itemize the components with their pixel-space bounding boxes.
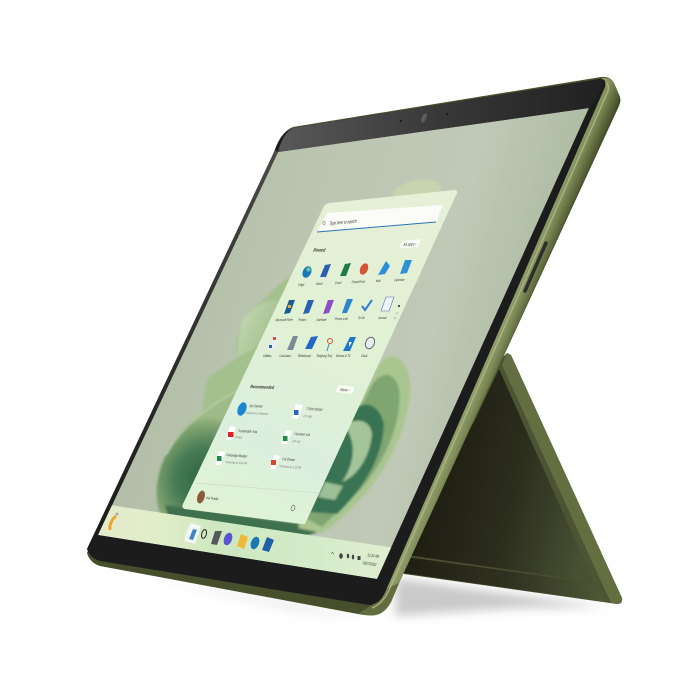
app: Whiteboard bbox=[297, 336, 318, 358]
black bezel bbox=[87, 79, 605, 605]
edge icon bbox=[249, 536, 261, 550]
store icon bbox=[262, 537, 274, 552]
kickstand recess line bbox=[411, 556, 592, 582]
app: Clock: Clock bbox=[360, 354, 369, 358]
search box: Type here to search bbox=[329, 218, 358, 226]
screen bbox=[98, 108, 589, 579]
widgets icon bbox=[211, 531, 222, 545]
app: Journal bbox=[377, 297, 394, 320]
app: Calculator: Calculator bbox=[279, 354, 293, 358]
app: OneNote bbox=[315, 300, 334, 322]
start menu bbox=[182, 190, 457, 524]
app: Utilities bbox=[263, 336, 280, 358]
file: T-Shirt Design: 17m ago bbox=[303, 414, 313, 419]
bloom: band under menu bbox=[164, 504, 318, 536]
app: Photos bbox=[298, 300, 314, 322]
file: Campaign Budget: Yesterday at 4:24 PM bbox=[225, 460, 248, 466]
app: Mail bbox=[375, 261, 390, 283]
app: Edge: Edge bbox=[298, 283, 305, 287]
all apps button bbox=[399, 239, 421, 248]
app: Phone Link bbox=[334, 299, 353, 321]
clock text: 10/27/2022 bbox=[362, 561, 377, 567]
file: Campaign Budget: Campaign Budget bbox=[226, 453, 248, 459]
wallpaper background bbox=[98, 108, 589, 579]
app: Calculator bbox=[279, 336, 298, 358]
app: Movies & TV: Movies & TV bbox=[335, 354, 352, 358]
file: Sustainable Sea bbox=[226, 426, 258, 440]
clock text: 12:22 AM bbox=[367, 553, 380, 559]
recommended heading: Recommended bbox=[250, 384, 275, 390]
app: Snipping Tool bbox=[316, 338, 333, 358]
chat icon bbox=[222, 532, 234, 546]
frame side strip bbox=[362, 78, 620, 615]
app: Snipping Tool: Snipping Tool bbox=[316, 354, 333, 358]
file: Sustainable Sea: Sustainable Sea bbox=[238, 429, 258, 434]
tablet bbox=[87, 77, 620, 615]
app: Mail: Mail bbox=[375, 279, 382, 283]
app: OneNote: OneNote bbox=[315, 318, 327, 322]
file: Get Started: Welcome to Windows bbox=[246, 411, 269, 416]
weather icon bbox=[110, 512, 118, 530]
app: Excel: Excel bbox=[335, 281, 342, 285]
sensor left bbox=[400, 120, 402, 122]
app: Calendar bbox=[393, 260, 412, 282]
left bezel edge bbox=[87, 150, 278, 549]
more button: More › bbox=[340, 388, 351, 393]
app: Movies & TV bbox=[335, 337, 356, 358]
file: Volunteer List: 12h ago bbox=[292, 439, 302, 444]
kickstand outer rim bbox=[502, 353, 622, 604]
bloom: right middle petal bbox=[305, 375, 400, 527]
app: Clock bbox=[361, 336, 376, 357]
app: Whiteboard: Whiteboard bbox=[297, 354, 312, 358]
kickstand bottom band bbox=[400, 556, 606, 602]
app: Photos: Photos bbox=[298, 318, 307, 322]
kickstand bbox=[390, 353, 622, 604]
bloom: left rolled petals bbox=[202, 277, 290, 411]
bloom bbox=[157, 179, 441, 542]
bloom: top back petal bbox=[392, 179, 441, 285]
side button bbox=[525, 243, 546, 291]
bloom: right outer petal bbox=[298, 356, 410, 533]
file: Car Dream bbox=[270, 455, 302, 470]
bloom: large lower left petal bbox=[156, 392, 260, 519]
bloom: right dark fold bbox=[310, 404, 384, 514]
kickstand recess bbox=[395, 369, 593, 582]
file: Get Started: Get Started bbox=[249, 404, 263, 409]
pager dots bbox=[394, 305, 400, 319]
clock text bbox=[362, 553, 380, 567]
app: Word: Word bbox=[316, 282, 323, 286]
more button bbox=[336, 385, 355, 394]
tablet frame base bbox=[87, 77, 620, 615]
tray icons bbox=[331, 552, 360, 560]
bloom: pale curl bbox=[342, 421, 372, 482]
bloom: pale lower fold bbox=[318, 482, 343, 500]
frame corner shading bbox=[358, 583, 399, 615]
frame highlight bbox=[372, 81, 608, 608]
pinned heading: Pinned bbox=[313, 247, 327, 253]
file: Volunteer List bbox=[282, 430, 311, 444]
menu footer divider bbox=[196, 483, 318, 493]
file: Car Dream: Car Dream bbox=[282, 457, 296, 462]
app: Excel bbox=[335, 263, 351, 285]
app: PowerPoint: PowerPoint bbox=[351, 279, 366, 284]
ground shadow bbox=[140, 576, 606, 618]
taskbar bbox=[98, 505, 395, 579]
camera bbox=[420, 113, 428, 123]
app: To Do: To Do bbox=[357, 316, 366, 320]
start button bbox=[184, 523, 201, 544]
app: Word bbox=[316, 264, 331, 286]
bloom: rolled highlight bbox=[238, 300, 279, 356]
app: Calendar: Calendar bbox=[393, 277, 406, 282]
user avatar and name: Kai Fowler bbox=[206, 496, 220, 501]
app: Utilities: Utilities bbox=[263, 354, 272, 358]
sensor right bbox=[446, 113, 448, 115]
search icon bbox=[201, 529, 207, 539]
top bezel with camera bbox=[278, 79, 605, 152]
bloom: petal edge highlight bbox=[166, 390, 240, 455]
search box bbox=[317, 205, 443, 232]
file: Get Started bbox=[235, 401, 269, 417]
user avatar and name bbox=[196, 490, 220, 504]
file: T-Shirt Design bbox=[292, 404, 324, 419]
app: Phone Link: Phone Link bbox=[334, 316, 349, 321]
folder icon bbox=[237, 534, 248, 549]
app: Microsoft Store bbox=[275, 300, 295, 322]
file: T-Shirt Design: T-Shirt Design bbox=[306, 407, 324, 412]
file: Sustainable Sea: 2h ago bbox=[235, 435, 243, 440]
file: Volunteer List: Volunteer List bbox=[294, 432, 311, 437]
app: Journal: Journal bbox=[377, 316, 387, 320]
power icon bbox=[290, 505, 296, 511]
file: Campaign Budget bbox=[215, 451, 248, 466]
rear dark hairline bbox=[510, 100, 620, 340]
app: PowerPoint bbox=[352, 263, 368, 284]
pinned apps bbox=[263, 260, 412, 358]
recommended files bbox=[215, 401, 324, 470]
file: Car Dream: Yesterday at 1:15 PM bbox=[279, 464, 302, 470]
app: Microsoft Store: Microsoft Store bbox=[275, 317, 294, 322]
app: Edge bbox=[298, 266, 312, 287]
all apps button: All apps › bbox=[403, 242, 418, 247]
app: To Do bbox=[357, 300, 372, 320]
